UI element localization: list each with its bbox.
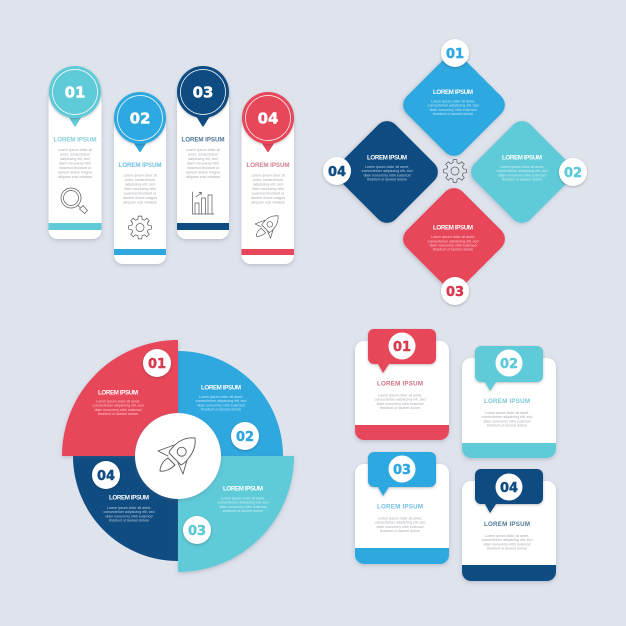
badge 03: 03 — [188, 524, 206, 539]
diamond 01: LOREM IPSUM — [433, 89, 473, 96]
text: segment 03 — [218, 485, 268, 513]
card 02 — [462, 346, 556, 458]
text: segment 03: Lorem ipsum dolor sit amet, — [221, 496, 265, 500]
icon: rocket — [158, 438, 195, 474]
icon: gear — [129, 216, 151, 239]
text: segment 04: tincidunt ut laoreet dolore — [109, 518, 149, 522]
card 04: LOREM IPSUM — [484, 521, 530, 528]
diamond 02: diam nonummy nibh euismod — [499, 173, 545, 177]
badge 01 — [143, 349, 171, 377]
card 02: Lorem ipsum dolor sit amet, — [485, 411, 529, 415]
badge 04 — [92, 461, 120, 489]
card 01: 01 — [65, 84, 85, 102]
card 02 — [114, 92, 166, 264]
card 04 — [242, 92, 294, 264]
diamond 03: tincidunt ut laoreet dolore — [433, 248, 473, 252]
card 01: euismod tincidunt ut — [59, 166, 91, 170]
card 01: aliquam erat volutpat — [58, 175, 92, 179]
text: segment 03: tincidunt ut laoreet dolore — [223, 509, 263, 513]
center circle — [135, 413, 221, 499]
card 03: amet, consectetuer — [188, 152, 219, 156]
icon: center gear — [444, 160, 466, 182]
panel: speech bubble cards — [355, 329, 556, 581]
card 01: LOREM IPSUM — [54, 137, 96, 144]
diamond 01: tincidunt ut laoreet dolore — [433, 112, 473, 116]
text: segment 01: diam nonummy nibh euismod — [95, 408, 141, 412]
diamond 01: consectetuer adipiscing elit, sed — [428, 104, 478, 108]
text: segment 02 — [196, 384, 246, 412]
text: segment 01: LOREM IPSUM — [98, 389, 138, 396]
text: segment 04 — [104, 494, 154, 522]
diamond 02 — [466, 116, 587, 228]
text: segment 02: LOREM IPSUM — [201, 384, 241, 391]
card 01: diam nonummy nibh euismod — [377, 402, 423, 406]
card 03 — [355, 452, 449, 564]
card 02: adipiscing elit, sed — [125, 182, 155, 186]
text: segment 01 — [93, 389, 143, 416]
card 04: euismod tincidunt ut — [252, 192, 284, 196]
card 02: LOREM IPSUM — [118, 162, 162, 169]
diamond 02: tincidunt ut laoreet dolore — [502, 178, 542, 182]
card 02: 02 — [130, 110, 150, 128]
badge 04: 04 — [97, 469, 115, 484]
card 03: LOREM IPSUM — [182, 137, 224, 144]
text: segment 04: LOREM IPSUM — [109, 494, 149, 501]
card 03: tincidunt ut laoreet dolore — [380, 529, 420, 533]
card 02: LOREM IPSUM — [484, 398, 530, 405]
diamond 03: Lorem ipsum dolor sit amet, — [431, 235, 475, 239]
card 01: consectetuer adipiscing elit, sed — [375, 398, 425, 402]
text: segment 04: Lorem ipsum dolor sit amet, — [107, 506, 151, 510]
text: segment 04: consectetuer adipiscing elit, sed — [104, 510, 154, 514]
segment 03 teal — [178, 456, 294, 572]
card 04: diam nonummy nibh — [252, 187, 284, 191]
card 01: 01 — [393, 340, 411, 355]
text: segment 02: tincidunt ut laoreet dolore — [201, 408, 241, 412]
card 03: diam nonummy nibh euismod — [377, 525, 423, 529]
card 03: LOREM IPSUM — [377, 504, 423, 510]
text: segment 01: tincidunt ut laoreet dolore — [98, 412, 138, 416]
card 01: Lorem ipsum dolor sit — [58, 148, 92, 152]
card 01: amet, consectetuer — [60, 152, 91, 156]
card 04: Lorem ipsum dolor sit amet, — [485, 534, 529, 538]
diamond 04: LOREM IPSUM — [367, 154, 407, 162]
card 03: 03 — [193, 84, 213, 102]
diamond 02: 02 — [564, 166, 582, 181]
card 04: Lorem ipsum dolor sit — [251, 174, 285, 178]
badge 01: 01 — [148, 357, 166, 372]
diamond 04 — [323, 116, 443, 228]
segment 01 red — [62, 340, 178, 456]
card 04: laoreet dolore magna — [251, 196, 285, 200]
card 03: laoreet dolore magna — [186, 171, 220, 175]
card 02: diam nonummy nibh euismod — [484, 419, 530, 423]
card 04: tincidunt ut laoreet dolore — [487, 546, 527, 550]
card 04: amet, consectetuer — [253, 178, 284, 182]
panel: vertical pin cards — [48, 66, 294, 264]
card 01: laoreet dolore magna — [58, 171, 92, 175]
card 04: 04 — [258, 110, 278, 128]
card 03: Lorem ipsum dolor sit — [186, 148, 220, 152]
diamond 04: tincidunt ut laoreet dolore — [367, 178, 407, 182]
text: segment 04: diam nonummy nibh euismod — [106, 514, 152, 518]
text: segment 03: diam nonummy nibh euismod — [220, 505, 266, 509]
card 01: Lorem ipsum dolor sit amet, — [378, 394, 422, 398]
text: segment 01: consectetuer adipiscing elit, sed — [93, 404, 143, 408]
text: segment 03: consectetuer adipiscing elit, sed — [218, 501, 268, 505]
card 01 — [355, 329, 449, 440]
card 02: consectetuer adipiscing elit, sed — [482, 415, 532, 419]
diamond 01: Lorem ipsum dolor sit amet, — [431, 100, 475, 104]
icon: magnifier — [61, 188, 88, 214]
diamond 04: Lorem ipsum dolor sit amet, — [365, 165, 409, 169]
text: segment 01: Lorem ipsum dolor sit amet, — [96, 400, 140, 404]
card 01: adipiscing elit, sed — [60, 157, 90, 161]
card 02: tincidunt ut laoreet dolore — [487, 424, 527, 428]
card 04: adipiscing elit, sed — [253, 182, 283, 186]
text: segment 02: diam nonummy nibh euismod — [198, 403, 244, 407]
card 01 — [48, 66, 102, 239]
card 03: adipiscing elit, sed — [188, 157, 218, 161]
card 04: LOREM IPSUM — [246, 162, 290, 169]
segment 02 blue — [178, 351, 283, 456]
card 03: euismod tincidunt ut — [187, 166, 219, 170]
icon: bar chart — [192, 192, 214, 214]
card 01: LOREM IPSUM — [377, 380, 423, 388]
segment 04 navy — [73, 456, 178, 561]
card 02: 02 — [500, 357, 518, 372]
diamond 04: consectetuer adipiscing elit, sed — [362, 169, 412, 173]
card 03 — [177, 66, 229, 239]
diamond 03: diam nonummy nibh euismod — [430, 244, 476, 248]
diamond 03: 03 — [446, 285, 464, 300]
card 02: laoreet dolore magna — [123, 196, 157, 200]
text: segment 02: consectetuer adipiscing elit, sed — [196, 399, 246, 403]
card 03: consectetuer adipiscing elit, sed — [375, 521, 425, 525]
card 04 — [462, 469, 556, 581]
card 02: Lorem ipsum dolor sit — [123, 174, 157, 178]
card 02: euismod tincidunt ut — [124, 192, 156, 196]
card 02: aliquam erat volutpat — [123, 201, 157, 205]
diamond 02: consectetuer adipiscing elit, sed — [497, 169, 547, 173]
diamond 04: diam nonummy nibh euismod — [364, 173, 410, 177]
card 02: amet, consectetuer — [125, 178, 156, 182]
icon: rocket — [255, 216, 278, 238]
panel: four diamonds — [323, 39, 587, 305]
panel: circular chart — [62, 340, 294, 572]
diamond 03: consectetuer adipiscing elit, sed — [428, 239, 478, 243]
card 03: Lorem ipsum dolor sit amet, — [378, 516, 422, 520]
card 01: tincidunt ut laoreet dolore — [380, 406, 420, 410]
diamond 04: 04 — [328, 165, 346, 180]
card 04: aliquam erat volutpat — [251, 201, 285, 205]
card 02: diam nonummy nibh — [124, 187, 156, 191]
badge 03 — [183, 516, 211, 544]
diamond 03: LOREM IPSUM — [433, 224, 473, 232]
text: segment 03: LOREM IPSUM — [223, 485, 263, 492]
diamond 01 — [398, 39, 510, 161]
badge 02: 02 — [236, 430, 254, 445]
diamond 01: diam nonummy nibh euismod — [430, 108, 476, 112]
card 03: aliquam erat volutpat — [186, 175, 220, 179]
card 01: diam nonummy nibh — [59, 162, 91, 166]
badge 02 — [231, 422, 259, 450]
text: segment 02: Lorem ipsum dolor sit amet, — [199, 395, 243, 399]
card 04: 04 — [500, 481, 518, 496]
diamond 02: Lorem ipsum dolor sit amet, — [500, 165, 544, 169]
card 04: consectetuer adipiscing elit, sed — [482, 538, 532, 542]
card 03: diam nonummy nibh — [187, 162, 219, 166]
diamond 01: 01 — [446, 47, 464, 62]
diamond 03 — [398, 183, 510, 305]
diamond 02: LOREM IPSUM — [502, 154, 542, 162]
card 03: 03 — [393, 463, 411, 478]
card 04: diam nonummy nibh euismod — [484, 542, 530, 546]
